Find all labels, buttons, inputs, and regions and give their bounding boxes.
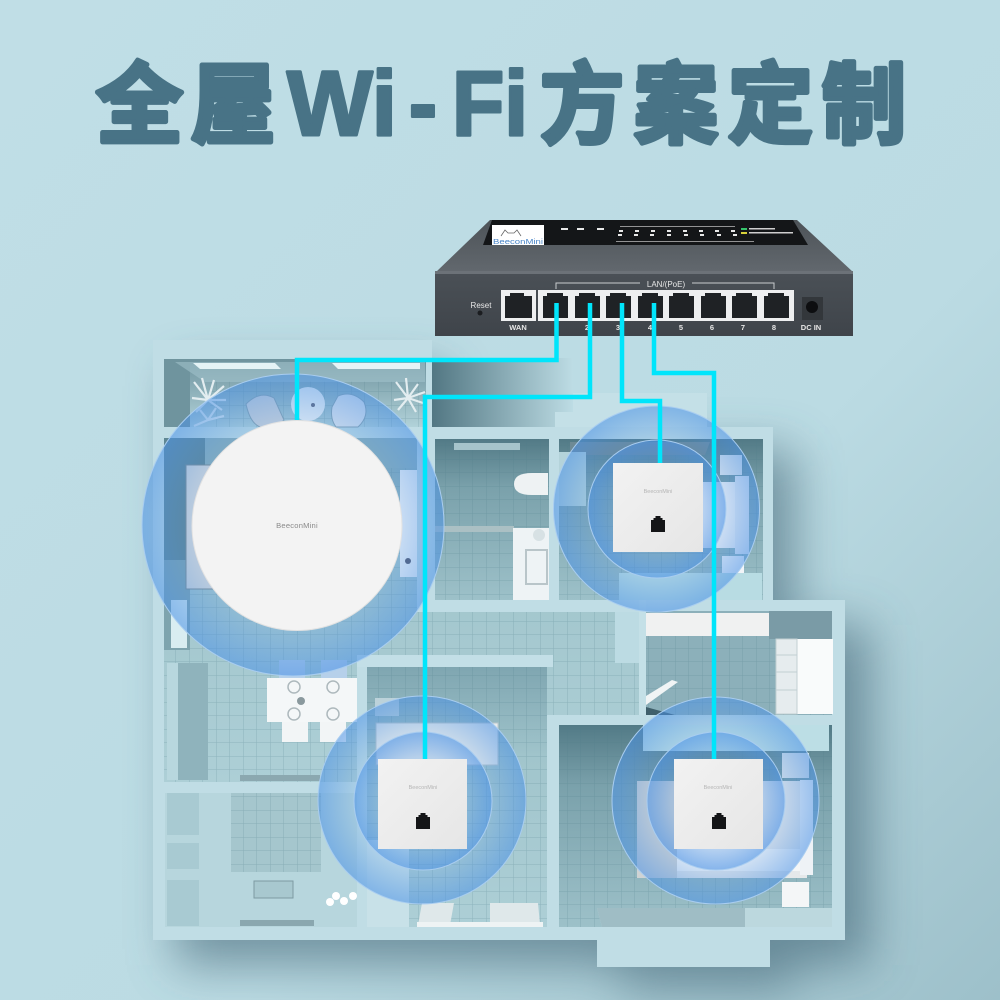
port labels: 2 bbox=[585, 323, 589, 332]
LED panel bbox=[483, 220, 808, 245]
room: utility bbox=[165, 793, 357, 927]
white desk bbox=[400, 470, 417, 577]
Wi-Fi coverage: right bedroom bbox=[612, 697, 819, 904]
bed bbox=[186, 465, 220, 589]
small terrace block bbox=[555, 393, 707, 427]
title: Wi bbox=[287, 53, 397, 155]
door bbox=[646, 680, 678, 705]
ports bbox=[501, 290, 794, 321]
title: 方 bbox=[540, 35, 624, 162]
partial wall below hall bbox=[357, 655, 553, 667]
upper pillar bbox=[615, 612, 639, 663]
LAN bracket: LAN/(PoE) bbox=[647, 280, 685, 289]
toilet bbox=[514, 473, 548, 495]
sink counter bbox=[513, 528, 549, 600]
switch top bbox=[436, 220, 853, 272]
wall panel AP: top bedroom: BeeconMini bbox=[644, 489, 672, 495]
room: bedroom 3 bbox=[367, 667, 547, 927]
title: 全 bbox=[96, 35, 183, 162]
switch front bbox=[435, 274, 853, 336]
Wi-Fi coverage: left bedroom bbox=[318, 696, 526, 904]
DC jack bbox=[802, 297, 823, 320]
LAN bracket bbox=[556, 280, 774, 289]
port labels: WAN bbox=[509, 323, 527, 332]
room: master bedroom 4 bbox=[559, 725, 832, 927]
lounge chairs and table bbox=[246, 395, 284, 427]
Wi-Fi coverage: ceiling AP bbox=[142, 374, 444, 676]
port labels: 8 bbox=[772, 323, 776, 332]
wall panel AP: right bedroom bbox=[674, 759, 763, 849]
title bbox=[96, 35, 906, 162]
port labels: 5 bbox=[679, 323, 683, 332]
house outer walls bbox=[153, 340, 845, 967]
room: kitchen bbox=[646, 611, 833, 715]
wall panel AP: right bedroom: BeeconMini bbox=[704, 785, 732, 791]
port labels: 4 bbox=[648, 323, 653, 332]
title: 屋 bbox=[191, 35, 275, 162]
title: Fi bbox=[452, 53, 528, 155]
port labels: DC IN bbox=[801, 323, 821, 332]
dining table bbox=[267, 660, 357, 742]
wardrobe shelf bbox=[171, 600, 187, 648]
room: bathroom bbox=[435, 439, 549, 600]
title: 案 bbox=[634, 35, 718, 162]
wall: hall divider bbox=[639, 600, 646, 715]
wall panel AP: top bedroom bbox=[613, 463, 703, 552]
port labels: 3 bbox=[616, 323, 620, 332]
port labels: 6 bbox=[710, 323, 714, 332]
wall panel AP: left bedroom: BeeconMini bbox=[409, 785, 437, 791]
floor plan bbox=[153, 340, 870, 990]
room: bedroom 2 bbox=[559, 439, 763, 600]
house shadow bbox=[175, 370, 870, 990]
cyan ethernet cables bbox=[297, 303, 714, 760]
Wi-Fi coverage: top bedroom bbox=[554, 406, 760, 612]
reset bbox=[471, 301, 492, 316]
wall panel AP: left bedroom bbox=[378, 759, 467, 849]
network switch bbox=[435, 220, 853, 336]
port labels bbox=[509, 323, 821, 332]
room: balcony bbox=[164, 359, 426, 427]
fridge bbox=[167, 663, 208, 780]
courtyard shadow bbox=[432, 358, 573, 430]
ceiling access point bbox=[192, 420, 402, 630]
ceiling access point: BeeconMini bbox=[276, 521, 318, 530]
title: 定 bbox=[728, 35, 813, 162]
logo badge: BeeconMini bbox=[493, 237, 543, 246]
logo badge bbox=[492, 225, 544, 246]
shelves bbox=[776, 639, 833, 714]
port labels: 7 bbox=[741, 323, 745, 332]
title: - bbox=[409, 53, 437, 155]
reset: Reset bbox=[471, 301, 492, 310]
plants bbox=[192, 378, 426, 426]
title: 制 bbox=[822, 35, 906, 162]
room: living and master bbox=[164, 438, 640, 782]
